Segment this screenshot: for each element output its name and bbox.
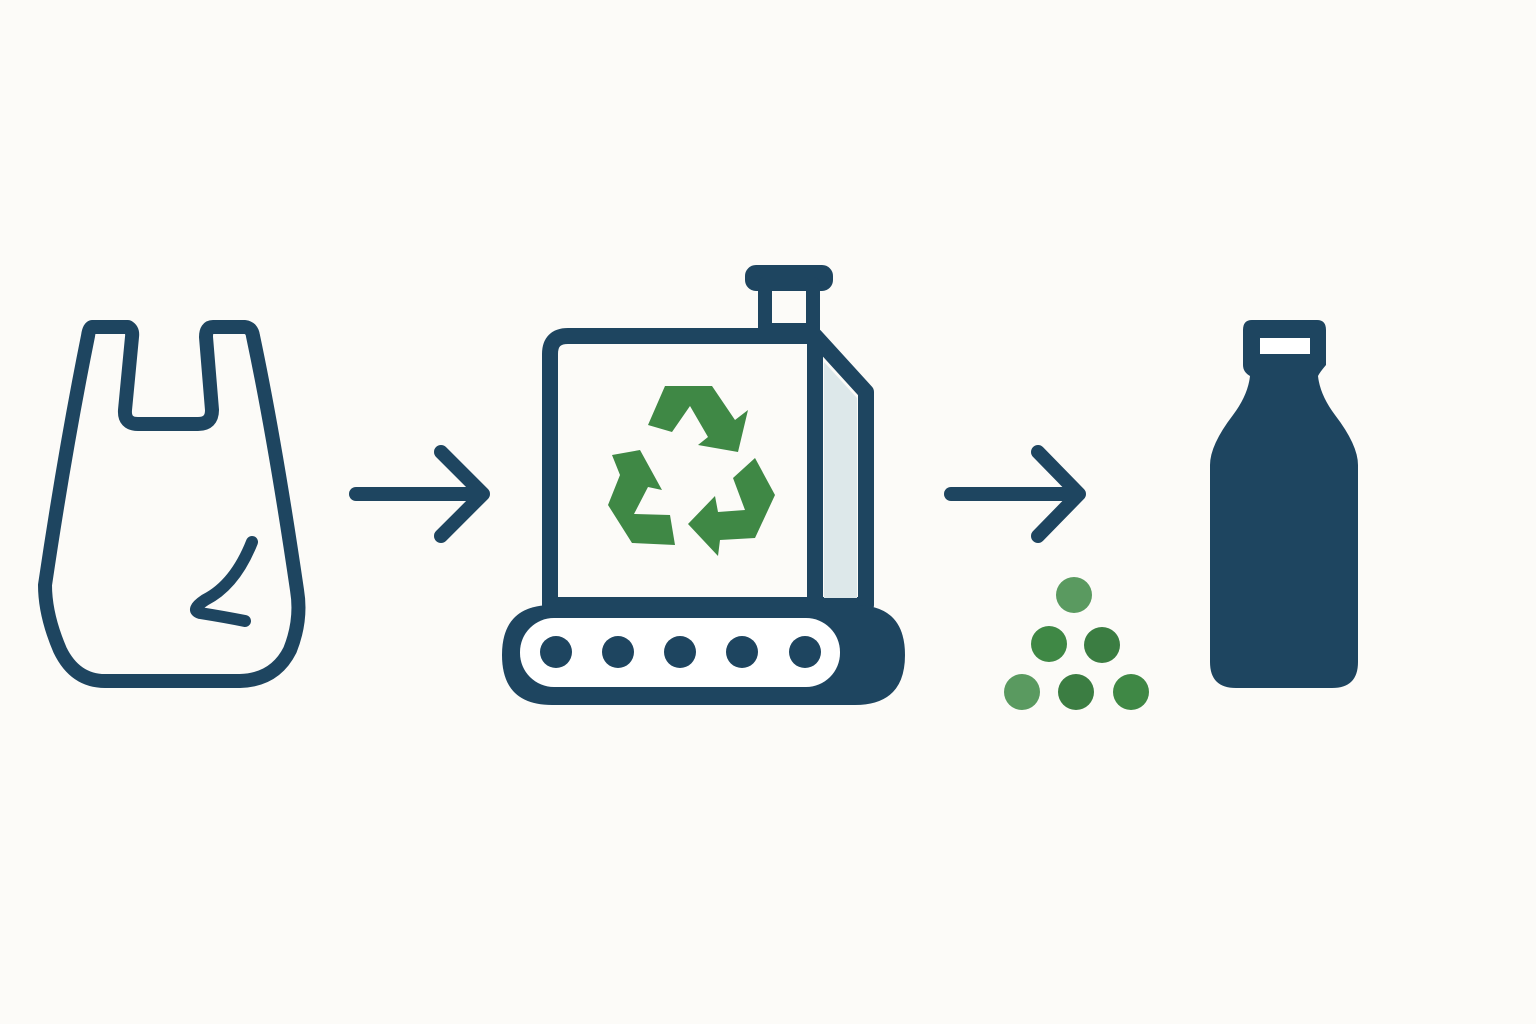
icon: bottle	[1210, 320, 1358, 688]
conveyor belt	[502, 605, 905, 705]
icon: plastic pellets	[1004, 577, 1149, 710]
recycle symbol	[608, 386, 775, 556]
icon: recycling machine	[502, 272, 905, 705]
side panel	[824, 362, 857, 598]
icon: plastic bag	[45, 327, 298, 681]
arrow: bag to machine	[356, 452, 483, 536]
machine body	[550, 336, 866, 605]
chimney	[752, 272, 826, 330]
arrow: machine to pellets	[951, 452, 1079, 536]
